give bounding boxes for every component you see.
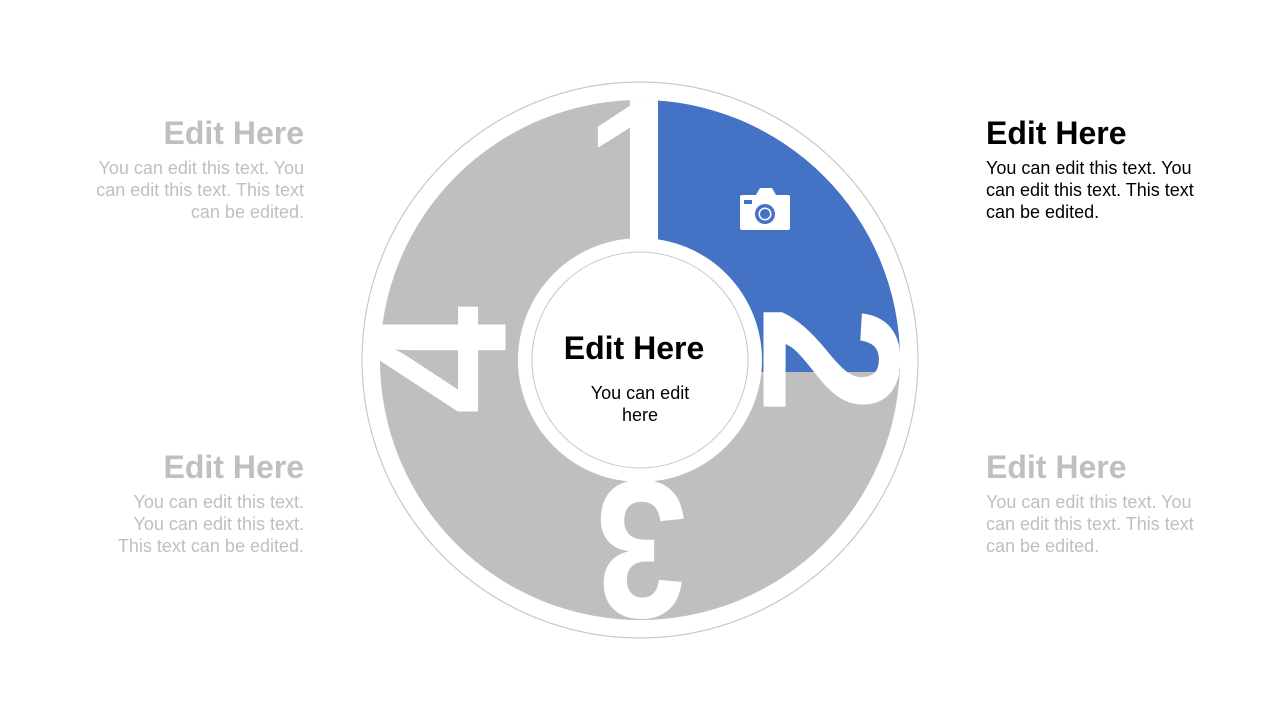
text block: bottom right: can be edited.	[986, 536, 1099, 556]
text block: top left: can edit this text. This text	[96, 180, 304, 200]
text block: bottom left: You can edit this text.	[134, 514, 304, 534]
center title: Edit Here	[564, 330, 704, 366]
number 4: 4	[328, 305, 548, 415]
text block: top left: Edit Here	[164, 115, 304, 151]
text block: top left	[96, 115, 304, 222]
text block: top right (active): You can edit this text. You	[986, 158, 1192, 178]
center text: You can edit	[591, 383, 689, 403]
text block: bottom left: You can edit this text.	[134, 492, 304, 512]
text block: bottom left: Edit Here	[164, 449, 304, 485]
text block: top left: can be edited.	[191, 202, 304, 222]
text block: top right (active): can edit this text. This text	[986, 180, 1194, 200]
number 3: 3	[595, 440, 687, 660]
blue quadrant	[658, 100, 900, 372]
text block: bottom left	[118, 449, 304, 556]
icon: camera	[740, 188, 790, 230]
text block: bottom left: This text can be edited.	[118, 536, 304, 556]
diagram: circular 4-step cycle: here	[622, 405, 658, 425]
text block: bottom right: can edit this text. This text	[986, 514, 1194, 534]
text block: top right (active)	[986, 115, 1194, 222]
gray ring	[380, 100, 900, 620]
number 2: 2	[722, 305, 940, 415]
text block: bottom right	[986, 449, 1194, 556]
text block: top right (active): Edit Here	[986, 115, 1126, 151]
text block: top right (active): can be edited.	[986, 202, 1099, 222]
text block: bottom right: You can edit this text. You	[986, 492, 1192, 512]
outer thin ring	[362, 82, 918, 638]
text block: top left: You can edit this text. You	[98, 158, 304, 178]
text block: bottom right: Edit Here	[986, 449, 1126, 485]
center white circle	[518, 238, 762, 482]
number 1: 1	[584, 62, 694, 282]
diagram: circular 4-step cycle	[361, 81, 919, 639]
